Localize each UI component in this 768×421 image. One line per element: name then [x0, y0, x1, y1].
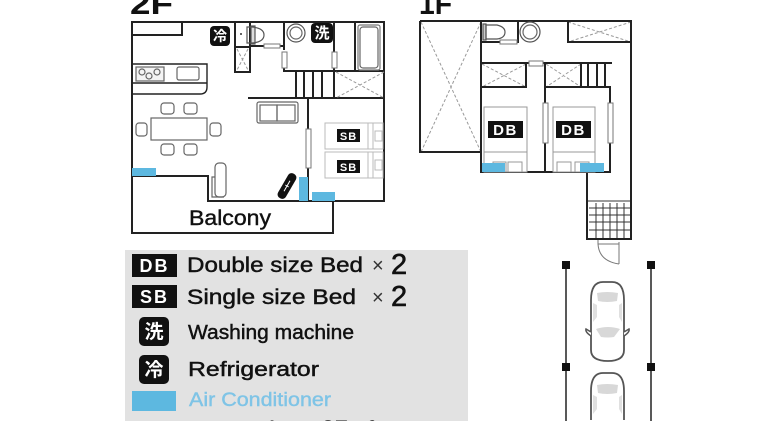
label: balcony: Balcony — [189, 207, 272, 230]
bathtub — [358, 25, 380, 70]
void cross marks — [421, 22, 631, 152]
legend row: single bed: × — [372, 287, 384, 309]
legend row: single bed — [132, 281, 407, 313]
closet cross marks — [237, 49, 384, 98]
legend row: double bed: × — [372, 255, 384, 277]
legend row: single bed: 2 — [391, 281, 407, 313]
icon: refrigerator: 冷 — [213, 28, 227, 44]
legend row: double bed — [132, 249, 407, 281]
legend row: double bed: 2 — [391, 249, 407, 281]
washbasin 1F — [520, 22, 540, 42]
panel: 1F floor plan — [420, 21, 631, 264]
balcony appliance — [212, 163, 226, 197]
toilet — [240, 26, 264, 44]
parking corner markers — [562, 261, 655, 371]
legend row: double bed: Double size Bed — [187, 254, 363, 277]
legend row: double bed: DB — [140, 256, 170, 276]
car 1 — [586, 282, 629, 361]
legend row: air conditioner — [132, 390, 332, 411]
legend row: refrigerator: Refrigerator — [188, 359, 319, 381]
1F doors — [500, 40, 613, 143]
icon: washing machine — [311, 23, 333, 43]
car 2 — [591, 373, 624, 420]
legend row: single bed: Single size Bed — [187, 286, 356, 309]
panel: parking — [562, 261, 655, 421]
legend row: air conditioner: Air Conditioner — [189, 390, 332, 411]
legend row: washing machine: 洗 — [144, 321, 164, 343]
dining table and chairs — [136, 103, 221, 155]
remote — [276, 172, 298, 200]
legend background — [125, 250, 468, 421]
icon: washing machine: 洗 — [314, 24, 330, 42]
2F doors — [264, 44, 337, 168]
panel: 2F floor plan — [132, 22, 384, 233]
entrance tile grid — [588, 201, 630, 238]
single beds — [325, 123, 383, 178]
air conditioners 1F — [482, 163, 604, 172]
toilet 1F — [483, 24, 505, 40]
badge: DB left — [488, 121, 523, 139]
icon: refrigerator — [210, 26, 230, 46]
badge: SB bed upper: SB — [340, 131, 357, 143]
entrance door swing — [598, 240, 619, 264]
panel: legend — [125, 249, 468, 421]
parking posts — [566, 265, 651, 421]
legend row: washing machine: Washing machine — [188, 322, 354, 344]
legend row: refrigerator — [139, 355, 319, 384]
legend row: single bed: SB — [140, 287, 169, 307]
2F walls — [132, 22, 384, 233]
badge: DB left: DB — [493, 122, 518, 139]
badge: DB right: DB — [561, 122, 586, 139]
air conditioners 2F — [132, 168, 335, 201]
badge: SB bed lower — [337, 160, 360, 174]
legend row: washing machine — [139, 317, 354, 346]
kitchen sink — [177, 67, 199, 80]
badge: DB right — [556, 121, 591, 139]
double beds — [484, 107, 595, 172]
stove — [136, 67, 164, 81]
legend row: refrigerator: 冷 — [144, 359, 164, 381]
washbasin — [287, 24, 305, 42]
badge: SB bed lower: SB — [340, 162, 357, 174]
badge: SB bed upper — [337, 129, 360, 143]
1F walls — [420, 21, 631, 239]
sofa — [257, 102, 298, 123]
